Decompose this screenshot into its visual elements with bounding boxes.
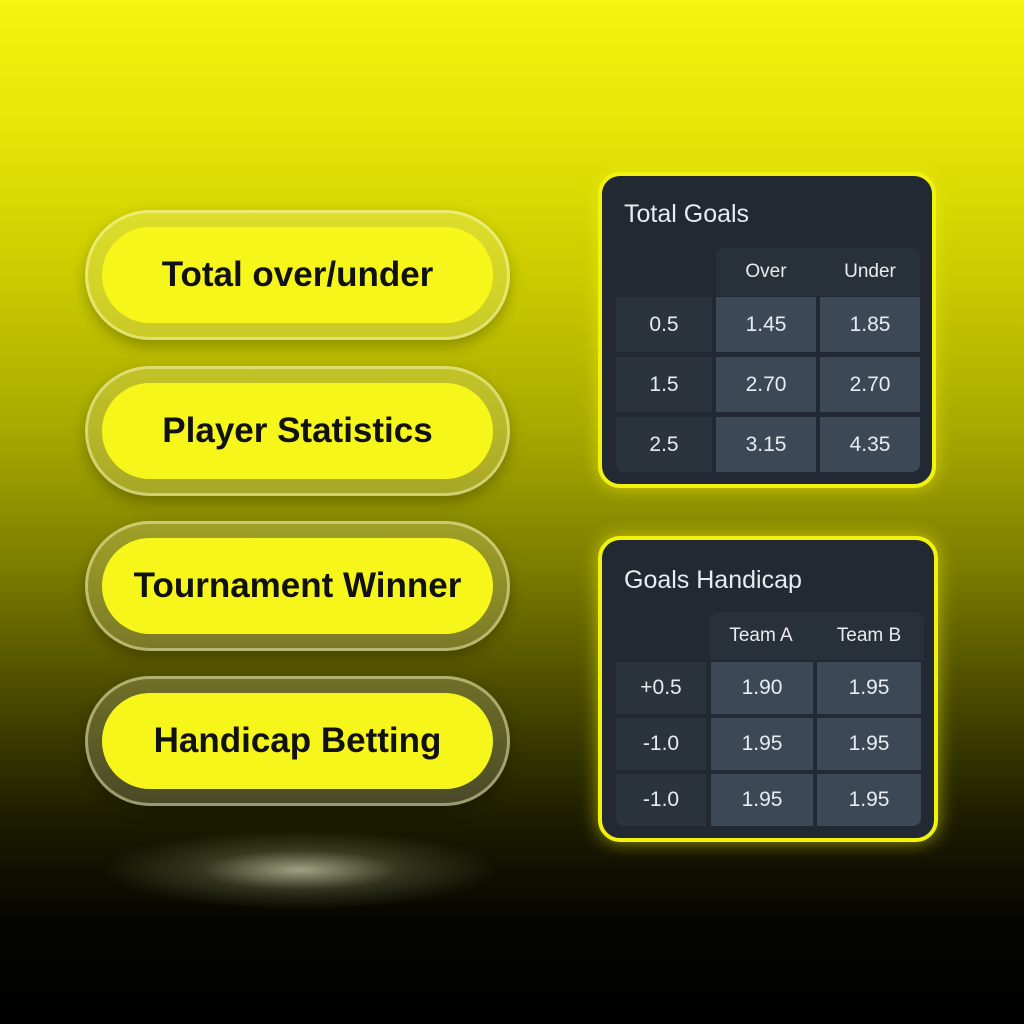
panel: Total Goals <box>598 172 936 488</box>
table header <box>710 612 924 660</box>
panel: Total Goals: Over <box>745 261 787 282</box>
panel: Total Goals: 2.5 <box>649 432 679 456</box>
pill: Handicap Betting <box>85 676 510 806</box>
rows <box>616 662 706 714</box>
pill: Player Statistics: Player Statistics <box>162 411 433 450</box>
panel: Goals Handicap: 1.95 <box>849 788 889 811</box>
glow under pills <box>100 830 500 910</box>
table header <box>716 248 920 296</box>
panel: Goals Handicap: 1.95 <box>849 732 889 755</box>
panel: Goals Handicap: Team B <box>837 625 901 646</box>
pill: Handicap Betting: Handicap Betting <box>154 721 441 760</box>
pill: Tournament Winner <box>85 521 510 651</box>
rows <box>616 297 712 352</box>
panel: Total Goals: 1.85 <box>850 312 890 336</box>
panel: Total Goals: 4.35 <box>850 432 890 456</box>
panel: Goals Handicap: Team A <box>729 625 793 646</box>
rows: +0.5 <box>640 676 682 699</box>
panel: Total Goals: 2.70 <box>746 372 786 396</box>
panel: Total Goals: 3.15 <box>746 432 786 456</box>
panel: Goals Handicap: 1.95 <box>742 732 782 755</box>
panel: Total Goals: 1.45 <box>746 312 786 336</box>
panel: Goals Handicap: -1.0 <box>643 788 679 811</box>
panel: Goals Handicap <box>598 536 938 842</box>
heading: Goals Handicap <box>624 566 802 594</box>
panel: Total Goals: Under <box>844 261 896 282</box>
panel: Goals Handicap: -1.0 <box>643 732 679 755</box>
panel: Goals Handicap: 1.95 <box>849 676 889 699</box>
pill: Total over/under <box>85 210 510 340</box>
pill: Tournament Winner: Tournament Winner <box>134 566 461 605</box>
panel: Goals Handicap: 1.90 <box>742 676 782 699</box>
panel: Total Goals: 2.70 <box>850 372 890 396</box>
pill: Player Statistics <box>85 366 510 496</box>
rows: 0.5 <box>649 312 679 336</box>
pill: Total over/under: Total over/under <box>162 255 433 294</box>
heading: Total Goals <box>624 200 749 228</box>
panel: Total Goals: 1.5 <box>649 372 679 396</box>
panel: Goals Handicap: 1.95 <box>742 788 782 811</box>
